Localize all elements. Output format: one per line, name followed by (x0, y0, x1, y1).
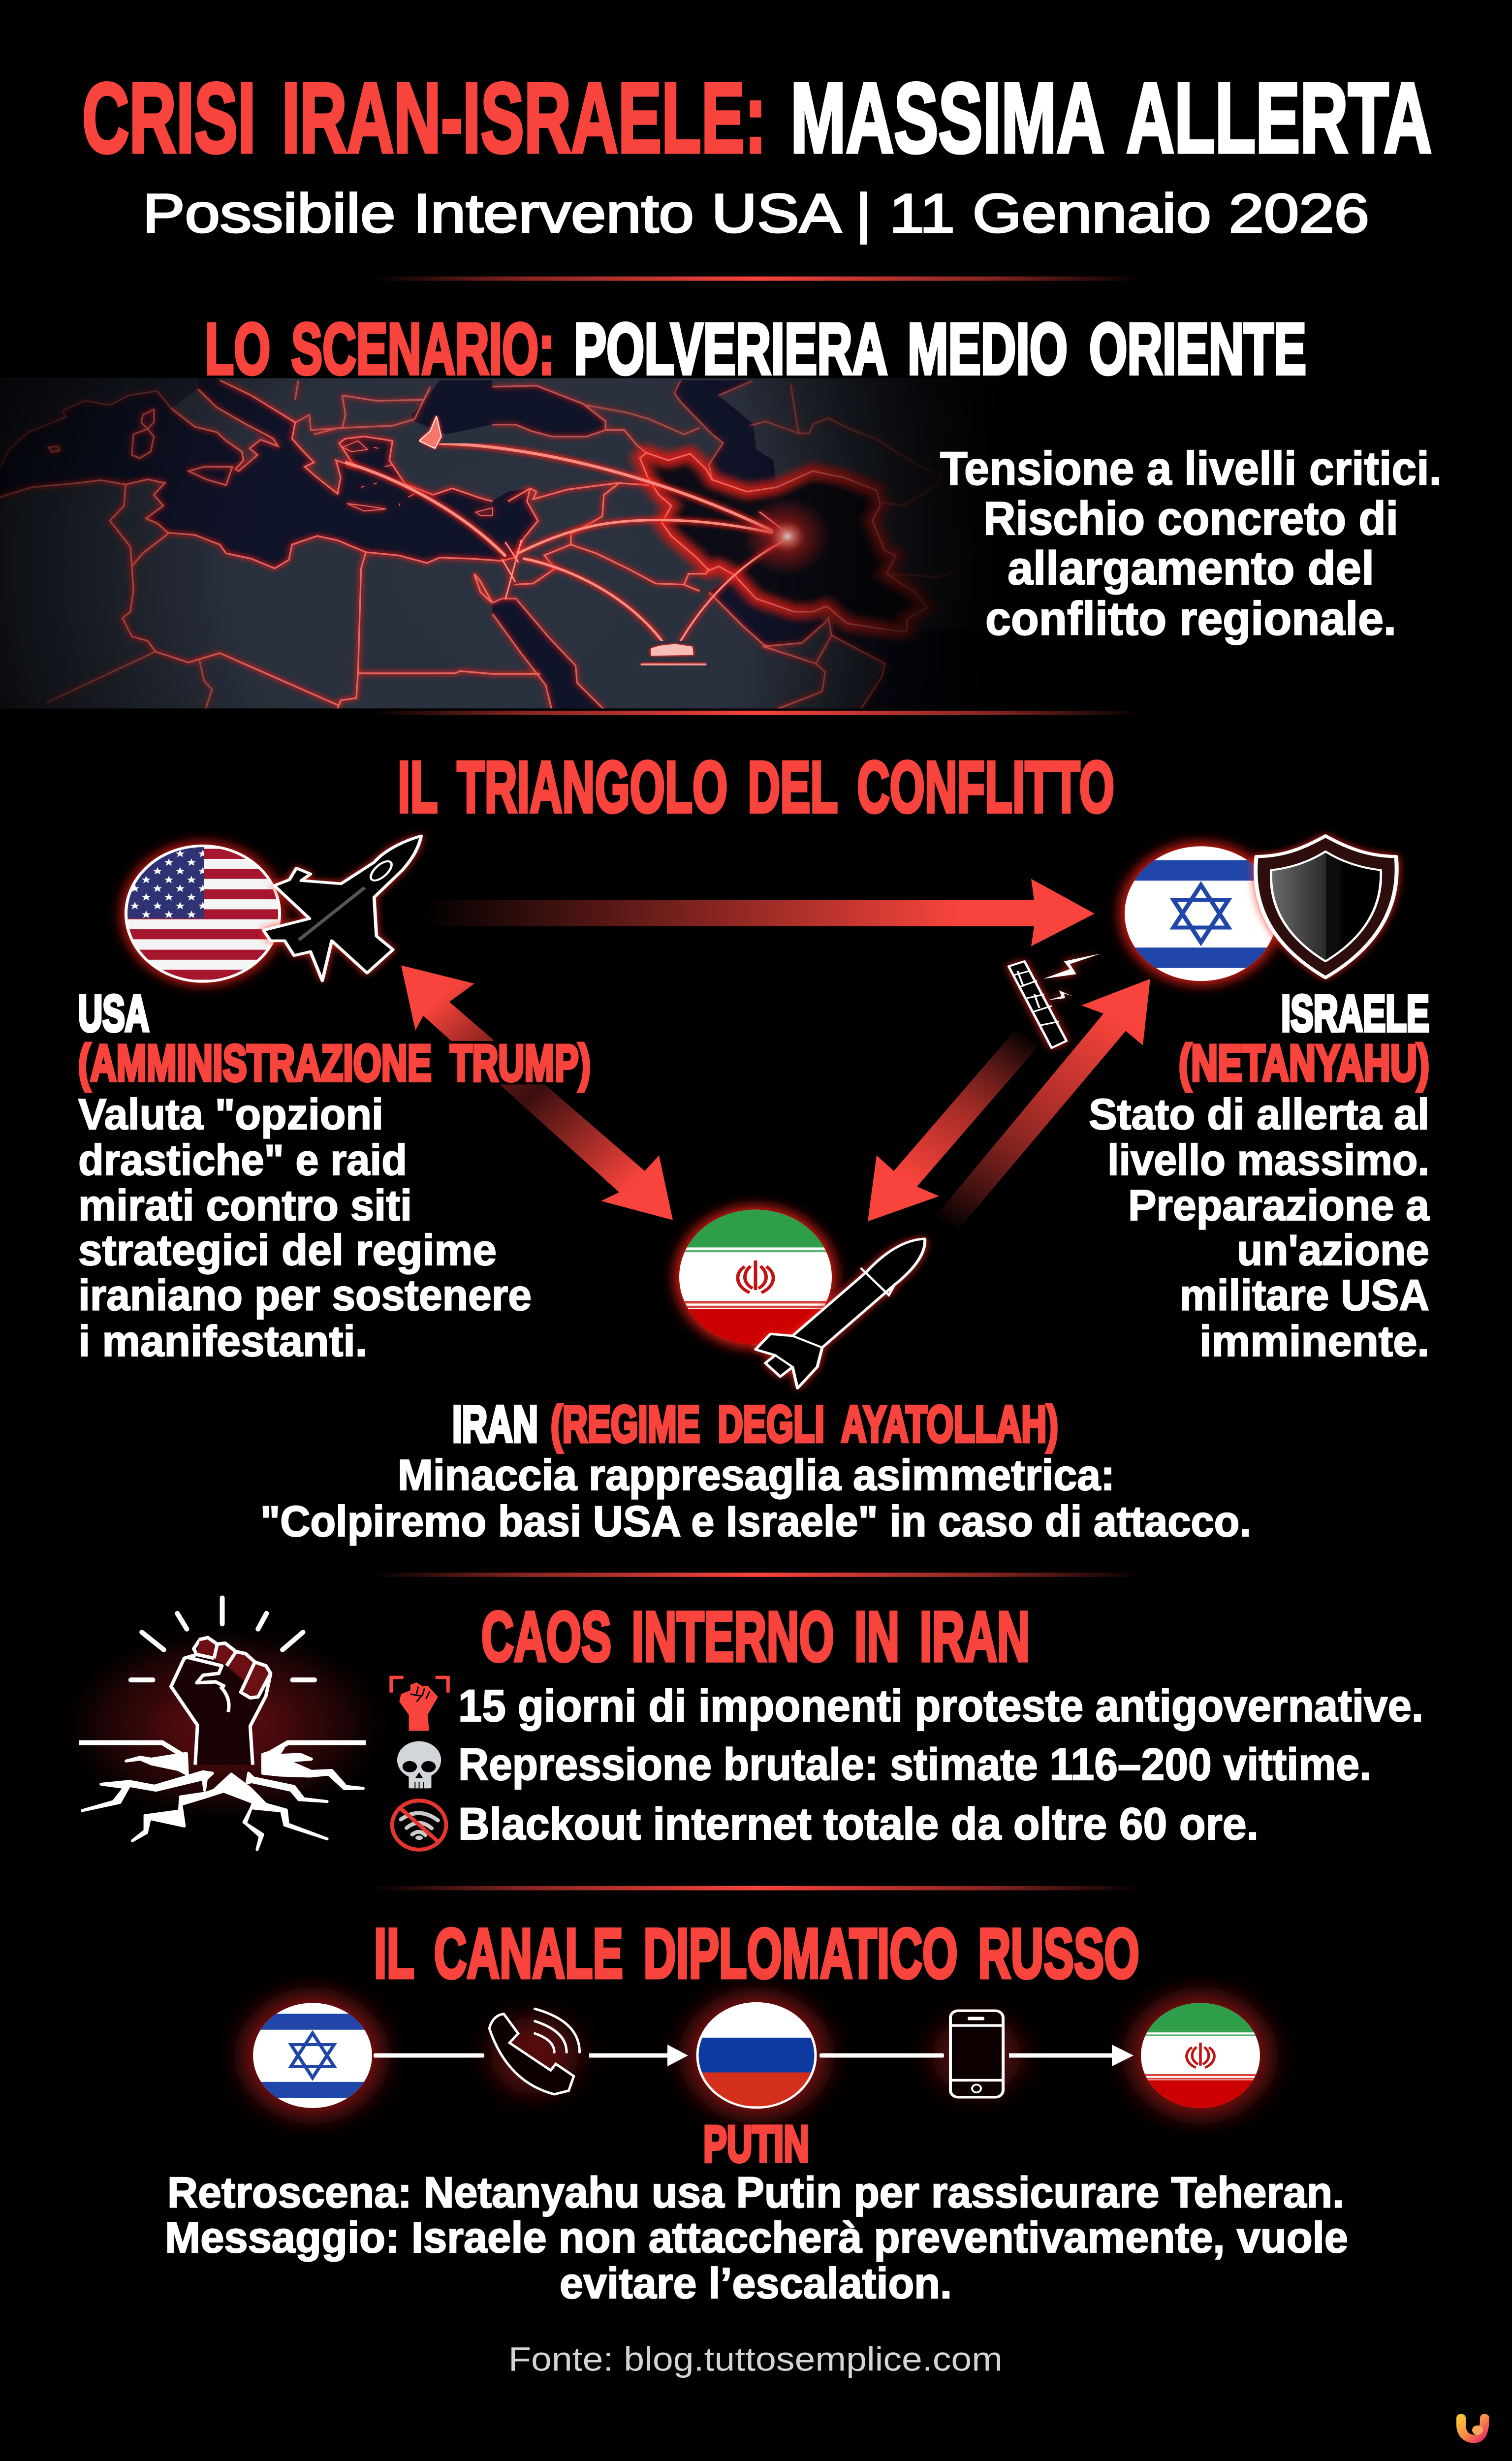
fist glow (49, 1596, 401, 1853)
map caption (940, 442, 1442, 645)
flag: israel (251, 2003, 374, 2108)
usa description: mirati contro siti (78, 1181, 412, 1230)
icon: skull (397, 1741, 441, 1788)
iran halo (675, 1206, 836, 1348)
arrow: usa iran double (401, 965, 673, 1220)
bullet: blackout: Blackout internet totale da oltre 60 ore. (458, 1798, 1259, 1849)
diplomatic description: evitare l’escalation. (560, 2259, 952, 2307)
usa halo (122, 842, 284, 985)
arrow to russia (589, 2045, 688, 2066)
icon: broken wall with lightning (1008, 953, 1101, 1048)
usa description: iraniano per sostenere (78, 1271, 532, 1319)
israel description: Preparazione a (1128, 1181, 1430, 1230)
usa description: strategici del regime (78, 1226, 497, 1274)
diplomatic description: Messaggio: Israele non attaccherà preventivamente, vuole (165, 2213, 1348, 2262)
map: iran inner glow (640, 453, 927, 631)
flag: iran (1139, 2001, 1262, 2111)
connector (819, 2053, 944, 2058)
arrow to iran (1009, 2045, 1134, 2066)
israel description: Stato di allerta al (1089, 1090, 1429, 1138)
icon: fighter jet (263, 836, 421, 981)
iran description: Minaccia rappresaglia asimmetrica: (398, 1451, 1115, 1499)
map: iran focal glow (743, 497, 832, 575)
usa node (122, 836, 421, 985)
diplomatic description (165, 2168, 1348, 2307)
diagram: diplomatic channel (244, 1994, 1269, 2116)
raised fist (171, 1638, 271, 1765)
iran label (452, 1395, 1058, 1453)
israel flag (1122, 846, 1280, 981)
arrow: iran to israel (936, 979, 1150, 1233)
usa description: i manifestanti. (78, 1317, 367, 1365)
israel halo (1120, 842, 1282, 985)
map caption: conflitto regionale. (985, 592, 1396, 645)
iran label: IRAN (452, 1395, 538, 1453)
israel node (1120, 836, 1397, 985)
heading: lo scenario: LO SCENARIO: (205, 309, 554, 389)
israel description: militare USA (1180, 1271, 1429, 1319)
usa description: drastiche" e raid (78, 1136, 407, 1184)
icon: no wifi (392, 1800, 446, 1850)
israel description: livello massimo. (1107, 1136, 1429, 1184)
subtitle: Possibile Intervento USA | 11 Gennaio 2026 (143, 183, 1369, 244)
iran flag (677, 1207, 834, 1348)
rays (131, 1598, 315, 1680)
usa description (78, 1090, 532, 1365)
usa label: USA (78, 984, 149, 1042)
usa label (78, 984, 591, 1092)
diplomatic description: Retroscena: Netanyahu usa Putin per rassicurare Teheran. (167, 2168, 1344, 2216)
icon: smartphone (950, 2011, 1003, 2097)
heading: lo scenario (205, 309, 1306, 389)
icon: missile (756, 1239, 925, 1388)
icon: phone handset (489, 2009, 580, 2094)
usa label: (AMMINISTRAZIONE TRUMP) (78, 1034, 591, 1092)
map: borders and coastlines (0, 380, 973, 711)
heading: internal chaos: CAOS INTERNO IN IRAN (481, 1598, 1030, 1676)
iran label: (REGIME DEGLI AYATOLLAH) (551, 1395, 1058, 1453)
map: attack arcs (346, 443, 787, 641)
israel description: un'azione (1237, 1226, 1429, 1274)
iran description: "Colpiremo basi USA e Israele" in caso di attacco. (260, 1497, 1251, 1546)
map: middle east (0, 374, 1043, 713)
israel description (1089, 1090, 1430, 1365)
source: Fonte: blog.tuttosemplice.com (508, 2340, 1003, 2378)
israel description: imminente. (1199, 1317, 1429, 1365)
cracks (82, 1748, 363, 1850)
usa flag (123, 843, 285, 981)
title: CRISI IRAN-ISRAELE: (82, 63, 766, 173)
map: mediterranean and seas (0, 378, 898, 709)
illustration: fist breaking ground (49, 1596, 401, 1853)
arrow: usa to israel (421, 879, 1095, 946)
iran description (260, 1451, 1251, 1546)
flag: russia (697, 2003, 816, 2108)
israel label (1179, 984, 1429, 1092)
map caption: Rischio concreto di (983, 492, 1398, 545)
iran node (675, 1206, 925, 1388)
label: putin: PUTIN (703, 2115, 809, 2173)
map: iran fill (647, 461, 909, 621)
ground line (79, 1743, 366, 1757)
icon: shield (1256, 836, 1397, 978)
icon: red fist (391, 1677, 448, 1731)
map caption: allargamento del (1008, 542, 1374, 594)
map: missile base icon (419, 416, 707, 665)
logo (1461, 2418, 1484, 2439)
arrow: israel to iran (868, 1025, 1040, 1221)
usa description: Valuta "opzioni (78, 1090, 383, 1138)
connector (374, 2053, 484, 2058)
halos (244, 1994, 1269, 2116)
usa label mask (74, 1041, 600, 1084)
